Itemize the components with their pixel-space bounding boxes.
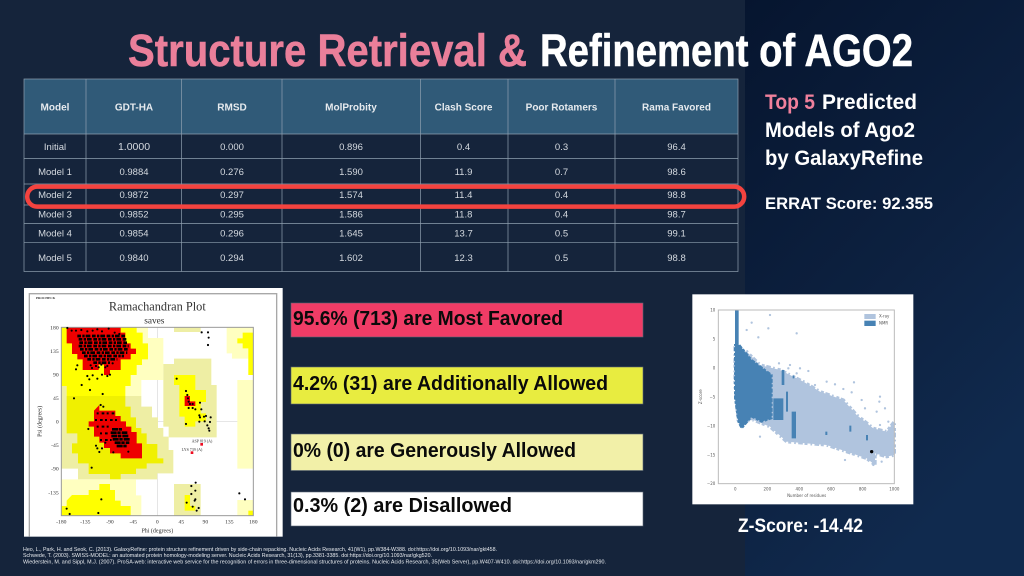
legend bar: generously allowed: 0% (0) are Generously Allowed xyxy=(293,440,576,462)
table header row: Model xyxy=(41,102,70,114)
Z-score scatter plot: Z-score xyxy=(698,389,703,404)
ERRAT score: ERRAT Score: 92.355 xyxy=(765,194,933,213)
Z-score scatter plot: 1000 xyxy=(889,486,900,491)
row: Model 1: 0.7 xyxy=(555,167,568,178)
Z-score label: Z-Score: -14.42 xyxy=(738,516,863,537)
legend bar: disallowed xyxy=(291,492,643,526)
Ramachandran plot: Ramachandran Plot xyxy=(109,300,206,314)
Ramachandran plot: Phi (degrees) xyxy=(141,527,173,534)
legend bar: disallowed: 0.3% (2) are Disallowed xyxy=(293,495,512,517)
Ramachandran plot: 90 xyxy=(53,372,59,378)
row: Model 3: Model 3 xyxy=(38,209,72,220)
Ramachandran plot: 180 xyxy=(249,519,258,525)
Z-score scatter plot: −20 xyxy=(707,481,716,486)
row: Model 2: 0.297 xyxy=(220,190,244,201)
Z-score scatter plot: 0 xyxy=(734,486,737,491)
row: Model 5: 0.9840 xyxy=(119,253,149,264)
Ramachandran plot: saves xyxy=(144,316,165,326)
Ramachandran plot: -45 xyxy=(51,443,59,449)
table header row: MolProbity xyxy=(325,102,377,114)
side heading: top 5 predicted models: Top 5 xyxy=(765,91,815,114)
row: Model 5: 0.5 xyxy=(555,253,568,264)
side heading: top 5 predicted models: Models of Ago2 xyxy=(765,119,915,142)
row: Initial: 0.896 xyxy=(339,142,363,153)
title xyxy=(128,25,913,76)
Z-score scatter plot: Number of residues xyxy=(787,493,826,498)
Z-score scatter plot: 200 xyxy=(764,486,772,491)
table header row xyxy=(41,102,711,114)
Z-score scatter plot: 600 xyxy=(827,486,835,491)
row: Model 1: 0.9884 xyxy=(119,167,149,178)
row: Model 5: 0.294 xyxy=(220,253,244,264)
row: Model 4: 99.1 xyxy=(667,228,686,240)
references xyxy=(23,547,606,566)
Ramachandran plot: -90 xyxy=(51,467,59,473)
row: Model 4: 13.7 xyxy=(454,228,473,240)
row: Model 5: 12.3 xyxy=(454,253,473,264)
row: Model 4: 1.645 xyxy=(339,228,363,240)
row: Model 2: 11.4 xyxy=(455,190,472,201)
row: Model 4 xyxy=(38,228,686,240)
title: Refinement of AGO2 xyxy=(540,25,913,76)
row: Model 2 xyxy=(38,190,686,201)
row: Model 3: 98.7 xyxy=(667,209,686,220)
table: refinement models xyxy=(24,79,738,272)
legend bar: additionally allowed xyxy=(291,367,643,404)
Z-score scatter plot: −15 xyxy=(707,453,716,458)
row: Model 1 xyxy=(38,167,686,178)
Ramachandran plot: -180 xyxy=(56,519,67,525)
legend bar: generously allowed xyxy=(291,434,643,470)
row: Initial: Initial xyxy=(44,142,66,153)
row: Model 3: 11.8 xyxy=(455,209,472,220)
row: Model 3: 0.9852 xyxy=(119,209,149,220)
legend bar: most favored xyxy=(291,303,643,337)
Ramachandran plot xyxy=(24,288,283,537)
Z-score scatter plot: 400 xyxy=(796,486,804,491)
title: Structure Retrieval & xyxy=(128,25,527,76)
row: Model 1: Model 1 xyxy=(38,167,72,178)
Z-score scatter plot: −5 xyxy=(709,395,716,400)
row: Model 2: 98.8 xyxy=(667,190,686,201)
table header row: Rama Favored xyxy=(642,102,711,114)
row: Model 4: Model 4 xyxy=(38,228,72,240)
Z-score scatter plot: −10 xyxy=(707,424,716,429)
highlight outline around Model 2 xyxy=(27,187,744,207)
row: Model 3: 0.4 xyxy=(555,209,568,220)
z-plot legend: X-ray xyxy=(879,314,890,319)
row: Model 2: 0.4 xyxy=(555,190,568,201)
table header row: GDT-HA xyxy=(115,102,153,114)
z-plot legend: NMR xyxy=(879,321,888,326)
side heading: top 5 predicted models xyxy=(765,91,923,170)
Ramachandran plot: Psi (degrees) xyxy=(36,406,43,437)
row: Model 1: 1.590 xyxy=(339,167,363,178)
table header row: RMSD xyxy=(217,102,247,114)
row: Initial: 0.000 xyxy=(220,142,244,153)
Ramachandran plot: -45 xyxy=(130,519,137,525)
row: Model 4: 0.9854 xyxy=(119,228,149,240)
Ramachandran plot: 0 xyxy=(56,420,59,426)
row: Model 3: 1.586 xyxy=(339,209,363,220)
references: Heo, L., Park, H. and Seok, C. (2013). GalaxyRefine: protein structure refinement driven by side-chain repacking. Nucleic Acids Research, 41(W1), pp.W384-W388. doi:https://doi.org/10.1093/nar/gkt458. xyxy=(23,547,497,553)
Z-score scatter plot: 5 xyxy=(713,337,716,342)
row: Model 5: 98.8 xyxy=(667,253,686,264)
row: Initial: 96.4 xyxy=(667,142,686,153)
side heading: top 5 predicted models: by GalaxyRefine xyxy=(765,147,923,170)
row: Model 5: 1.602 xyxy=(339,253,363,264)
row: Model 1: 0.276 xyxy=(220,167,244,178)
legend bar: most favored: 95.6% (713) are Most Favored xyxy=(293,308,563,330)
Z-score scatter plot: 800 xyxy=(859,486,867,491)
Z-score scatter plot: 0 xyxy=(713,366,716,371)
row: Model 2: 0.9872 xyxy=(119,190,149,201)
row: Model 3: 0.295 xyxy=(220,209,244,220)
Z-score scatter plot: 10 xyxy=(710,308,716,313)
Ramachandran plot: 0 xyxy=(156,519,159,525)
row: Model 5: Model 5 xyxy=(38,253,72,264)
row: Initial: 1.0000 xyxy=(118,141,150,153)
row: Model 2: Model 2 xyxy=(38,190,72,201)
Ramachandran plot: -135 xyxy=(80,519,91,525)
table header row: Poor Rotamers xyxy=(526,102,598,114)
row: Initial xyxy=(44,141,686,153)
z-plot legend xyxy=(864,314,890,326)
row: Model 5 xyxy=(38,253,686,264)
row: Model 2: 1.574 xyxy=(339,190,363,201)
Ramachandran plot: PROCHECK xyxy=(36,296,56,300)
Ramachandran plot: LYS 739 (A) xyxy=(182,447,203,452)
Ramachandran plot: 45 xyxy=(179,519,184,525)
Ramachandran plot: ASP 819 (A) xyxy=(192,438,213,443)
Ramachandran plot: 135 xyxy=(50,349,59,355)
row: Model 1: 11.9 xyxy=(455,167,472,178)
Ramachandran plot: 135 xyxy=(225,519,234,525)
side heading: top 5 predicted models: Predicted xyxy=(822,91,917,114)
row: Model 3 xyxy=(38,209,686,220)
table header row: Clash Score xyxy=(435,102,493,114)
references: Schwede, T. (2003). SWISS-MODEL: an automated protein homology-modeling server. Nucleic Acids Research, 31(13), pp.3381-3385. doi:https://doi.org/10.1093/nar/gkg520. xyxy=(23,553,432,559)
Ramachandran plot: 180 xyxy=(50,325,59,331)
Ramachandran plot: 90 xyxy=(203,519,208,525)
legend bar: additionally allowed: 4.2% (31) are Additionally Allowed xyxy=(293,373,608,395)
row: Model 4: 0.5 xyxy=(555,228,568,240)
row: Model 4: 0.296 xyxy=(220,228,244,240)
row: Initial: 0.4 xyxy=(457,142,470,153)
Z-score scatter plot xyxy=(692,294,913,504)
Ramachandran plot: 45 xyxy=(53,396,59,402)
Ramachandran plot: -90 xyxy=(106,519,114,525)
references: Wiederstein, M. and Sippl, M.J. (2007). ProSA-web: interactive web service for the recognition of errors in three-dimensional structures of proteins. Nucleic Acids Research, 35(Web Server), pp.W407-W410. doi:https://doi.org/10.1093/nar/gkm290. xyxy=(23,560,606,566)
row: Initial: 0.3 xyxy=(555,142,568,153)
Ramachandran plot: -135 xyxy=(48,490,59,496)
row: Model 1: 98.6 xyxy=(667,167,686,178)
